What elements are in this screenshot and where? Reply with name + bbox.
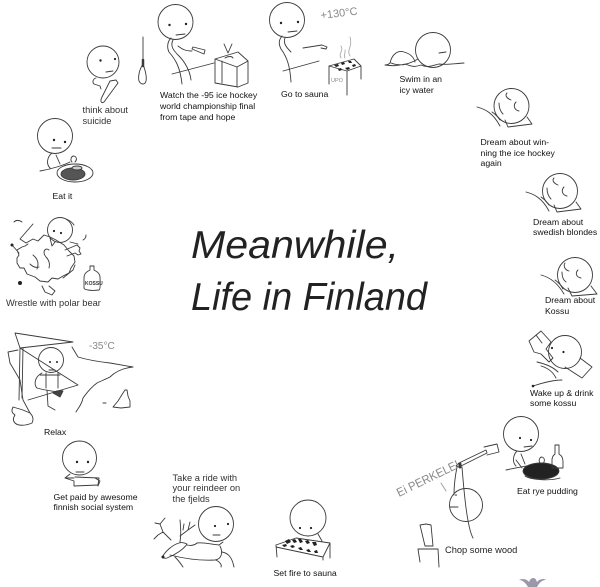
label: Take a ride with [172,473,237,483]
icon: figure watching TV [158,4,248,87]
icon: jester logo [519,578,546,587]
annotation: sauna temperature: +130°C [320,6,358,22]
panel: dream about kossu [541,258,597,316]
label: Kossu [545,306,569,316]
label: Wake up & drink [530,388,594,398]
panel: wrestle with polar bear [6,218,103,308]
panel: go to sauna [270,2,361,99]
icon: figure with plate [38,118,93,182]
panel: relax [8,333,133,437]
icon: figure holding cheque [62,441,100,486]
panel: dream about swedish blondes [526,174,598,237]
panel: think about suicide [82,37,146,126]
label: the fjelds [172,494,210,504]
label: again [480,158,502,168]
panel: set fire to sauna [274,500,337,578]
icon: sleeping head [541,258,597,296]
label: from tape and hope [160,112,236,122]
label: Get paid by awesome [54,492,138,502]
icon: figure in shelter [8,333,133,425]
annotation: shout: Ei PERKELE! [394,457,461,500]
label: icy water [400,85,434,95]
label: some kossu [530,398,577,408]
label: Dream about [533,217,584,227]
label: world championship final [159,101,255,111]
icon: figure over stove [276,500,330,560]
title [191,224,428,319]
label: swedish blondes [533,227,598,237]
panel: dream about winning [477,88,556,168]
panel: eat rye pudding [504,416,578,496]
icon: figure chopping wood [418,444,499,567]
label: Swim in an [400,74,442,84]
label: Eat rye pudding [517,486,578,496]
title: Meanwhile, [191,224,399,267]
icon: figure with pudding and bottle [504,416,563,480]
label: think about [82,105,128,115]
label: Wrestle with polar bear [6,298,101,308]
icon: figure riding reindeer [154,506,234,567]
icon: drinking kossu [529,331,592,387]
panel: wake up and drink [529,331,594,408]
panel: watch ice hockey [158,4,258,122]
label: Set fire to sauna [274,568,337,578]
label: Dream about win- [480,137,549,147]
panel: eat it [38,118,93,201]
icon: kossu bottle [84,266,100,290]
label: finnish social system [54,502,133,512]
label: Watch the -95 ice hockey [160,90,258,100]
title: Life in Finland [191,276,428,319]
panel: reindeer ride [154,473,240,567]
icon: sleeping head [477,88,532,127]
icon: figure with bottle [87,37,146,103]
label: Eat it [52,191,73,201]
label: suicide [82,116,111,126]
label: Chop some wood [445,545,517,555]
icon: figure at sauna stove [270,2,361,95]
icon: head above water [385,32,464,68]
annotation: stove label: UPO [331,78,344,84]
icon: sleeping head [526,174,581,212]
panel: get paid [54,441,138,512]
label: Relax [44,427,67,437]
label: Dream about [545,295,596,305]
bottle label: KOSSU [85,281,103,287]
panel: swim in icy water [385,32,464,95]
label: Go to sauna [281,89,329,99]
panel: chop some wood [394,444,517,567]
annotation: temperature: -35°C [89,341,115,352]
label: ning the ice hockey [480,148,556,158]
label: your reindeer on [172,483,240,493]
icon: figure wrestling bear [10,218,86,295]
